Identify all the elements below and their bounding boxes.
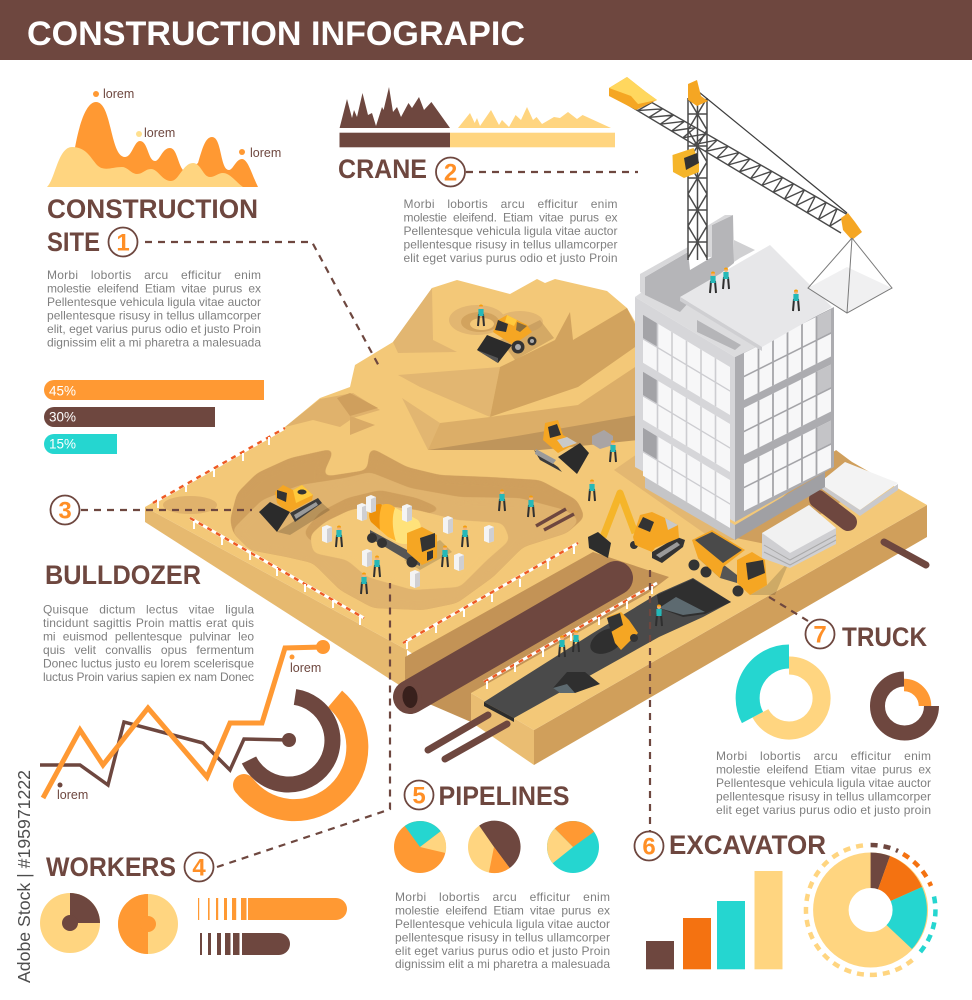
heading: crane: 2 xyxy=(444,160,457,186)
heading: truck: TRUCK xyxy=(842,622,927,652)
heading: construction site: SITE xyxy=(47,227,100,257)
text block: crane: molestie eleifend. Etiam vitae purus ex xyxy=(404,210,618,224)
striped bars: workers xyxy=(198,898,347,955)
text block: bulldozer: quis velit convallis opus fermentum xyxy=(43,643,254,657)
text block: truck: elit eget varius purus odio et justo proin xyxy=(716,803,931,817)
heading: crane xyxy=(338,154,465,186)
number badge 3 xyxy=(50,496,80,524)
heading: crane: CRANE xyxy=(338,154,427,184)
concrete blocks xyxy=(322,495,494,588)
text block: bulldozer: Donec luctus justo eu lorem scelerisque xyxy=(43,656,254,670)
stacks of concrete slabs xyxy=(762,505,836,568)
text block: truck: Morbi lobortis arcu efficitur enim xyxy=(716,749,931,763)
pie charts: workers xyxy=(40,893,178,954)
text block: crane: pellentesque risusy in tellus ullamcorper xyxy=(404,238,618,252)
text block: bulldozer: Quisque dictum lectus vitae ligula xyxy=(43,603,254,617)
bar chart: excavator xyxy=(646,871,782,969)
heading: workers: 4 xyxy=(192,854,206,882)
pie charts: pipelines xyxy=(394,821,599,873)
mountain with pit and facets xyxy=(163,288,638,514)
number badge 3: 3 xyxy=(58,498,72,524)
heading: bulldozer: BULLDOZER xyxy=(45,560,201,590)
asphalt road xyxy=(484,578,731,722)
bar chart: percentages: 45% xyxy=(49,384,76,398)
text block: pipelines: dignissim elit a mi pharetra a malesuada xyxy=(395,957,610,971)
donut charts: truck xyxy=(748,656,932,733)
stock credit: Adobe Stock | #195971222 xyxy=(14,770,34,983)
excavator xyxy=(588,493,685,563)
text block: truck xyxy=(716,749,931,817)
heading: excavator: EXCAVATOR xyxy=(669,830,826,860)
text block: pipelines: Pellentesque vehicula ligula vitae auctor xyxy=(395,917,610,931)
heading: workers: WORKERS xyxy=(46,852,176,882)
text block: truck: Pellentesque vehicula ligula vitae auctor xyxy=(716,776,931,790)
text block: pipelines xyxy=(395,890,610,971)
area chart: construction site: lorem xyxy=(144,126,175,140)
pipe bundle xyxy=(818,499,848,522)
heading: pipelines: 5 xyxy=(412,782,426,810)
text block: construction site: dignissim elit a mi pharetra a malesuada xyxy=(47,336,261,350)
text block: crane: elit eget varius purus odio et justo Proin xyxy=(404,251,618,265)
workers xyxy=(336,268,799,657)
text block: pipelines: Morbi lobortis arcu efficitur enim xyxy=(395,890,610,904)
header banner: CONSTRUCTION INFOGRAPIC xyxy=(27,15,525,53)
dump truck xyxy=(688,530,790,596)
road roller xyxy=(586,612,638,659)
bar chart: percentages: 15% xyxy=(49,436,76,452)
cement mixer truck xyxy=(367,504,452,570)
text block: pipelines: pellentesque risusy in tellus ullamcorper xyxy=(395,930,610,944)
rock pile xyxy=(592,430,613,449)
text block: truck: pellentesque risusy in tellus ullamcorper xyxy=(716,790,931,804)
line chart with arcs xyxy=(40,640,357,810)
isometric construction site base xyxy=(145,279,927,765)
bulldozer in pit xyxy=(259,485,330,535)
wheeled bulldozer on mountain xyxy=(477,315,536,363)
fences xyxy=(153,428,578,649)
text block: crane: Morbi lobortis arcu efficitur enim xyxy=(404,197,618,211)
tower crane xyxy=(609,77,892,313)
line chart with arcs: lorem xyxy=(57,788,88,802)
area chart: construction site xyxy=(47,87,281,187)
text block: pipelines: elit eget varius purus odio et justo Proin xyxy=(395,944,610,958)
text block: construction site: Morbi lobortis arcu efficitur enim xyxy=(47,268,261,282)
connector lines xyxy=(81,172,808,867)
stack of panels xyxy=(819,462,898,516)
text block: bulldozer: luctus Proin varius sapien ex nam Donec xyxy=(43,670,254,684)
text block: crane: Pellentesque vehicula ligula vitae auctor xyxy=(404,224,618,238)
area chart: construction site: lorem xyxy=(103,87,134,101)
heading: construction site: 1 xyxy=(116,230,130,256)
text block: bulldozer xyxy=(43,603,254,684)
mountain chart: crane xyxy=(340,87,615,147)
bar chart: percentages xyxy=(44,380,264,454)
text block: pipelines: molestie eleifend Etiam vitae purus ex xyxy=(395,904,610,918)
heading: excavator: 6 xyxy=(642,834,656,860)
text block: construction site: elit, eget varius purus odio et justo Proin xyxy=(47,322,261,336)
crawler bulldozer xyxy=(534,420,589,474)
heading: pipelines: PIPELINES xyxy=(438,781,570,811)
heading: construction site xyxy=(47,194,258,257)
text block: truck: molestie eleifend Etiam vitae purus ex xyxy=(716,762,931,776)
text block: construction site: pellentesque risusy in tellus ullamcorper xyxy=(47,308,261,322)
pipeline trench and large pipe xyxy=(397,552,669,722)
bar chart: percentages: 30% xyxy=(49,410,76,424)
area chart: construction site: lorem xyxy=(250,146,281,160)
text block: construction site: Pellentesque vehicula ligula vitae auctor xyxy=(47,295,261,309)
text block: construction site: molestie eleifend Etiam vitae purus ex xyxy=(47,282,261,296)
donut chart: excavator xyxy=(806,845,935,975)
small pipes xyxy=(428,509,926,759)
line chart with arcs: lorem xyxy=(290,661,321,675)
heading: construction site: CONSTRUCTION xyxy=(47,194,258,224)
excavation pit contours xyxy=(230,447,585,610)
header banner xyxy=(0,0,972,60)
heading: truck: 7 xyxy=(813,622,827,648)
text block: construction site xyxy=(47,268,261,350)
text block: bulldozer: tincidunt sagittis Proin mattis erat quis xyxy=(43,616,254,630)
text block: crane xyxy=(404,197,618,265)
text block: bulldozer: mi euismod pellentesque pulvinar leo xyxy=(43,630,254,644)
building xyxy=(635,215,834,540)
fence beside road xyxy=(484,583,657,689)
heading: truck xyxy=(806,620,927,652)
